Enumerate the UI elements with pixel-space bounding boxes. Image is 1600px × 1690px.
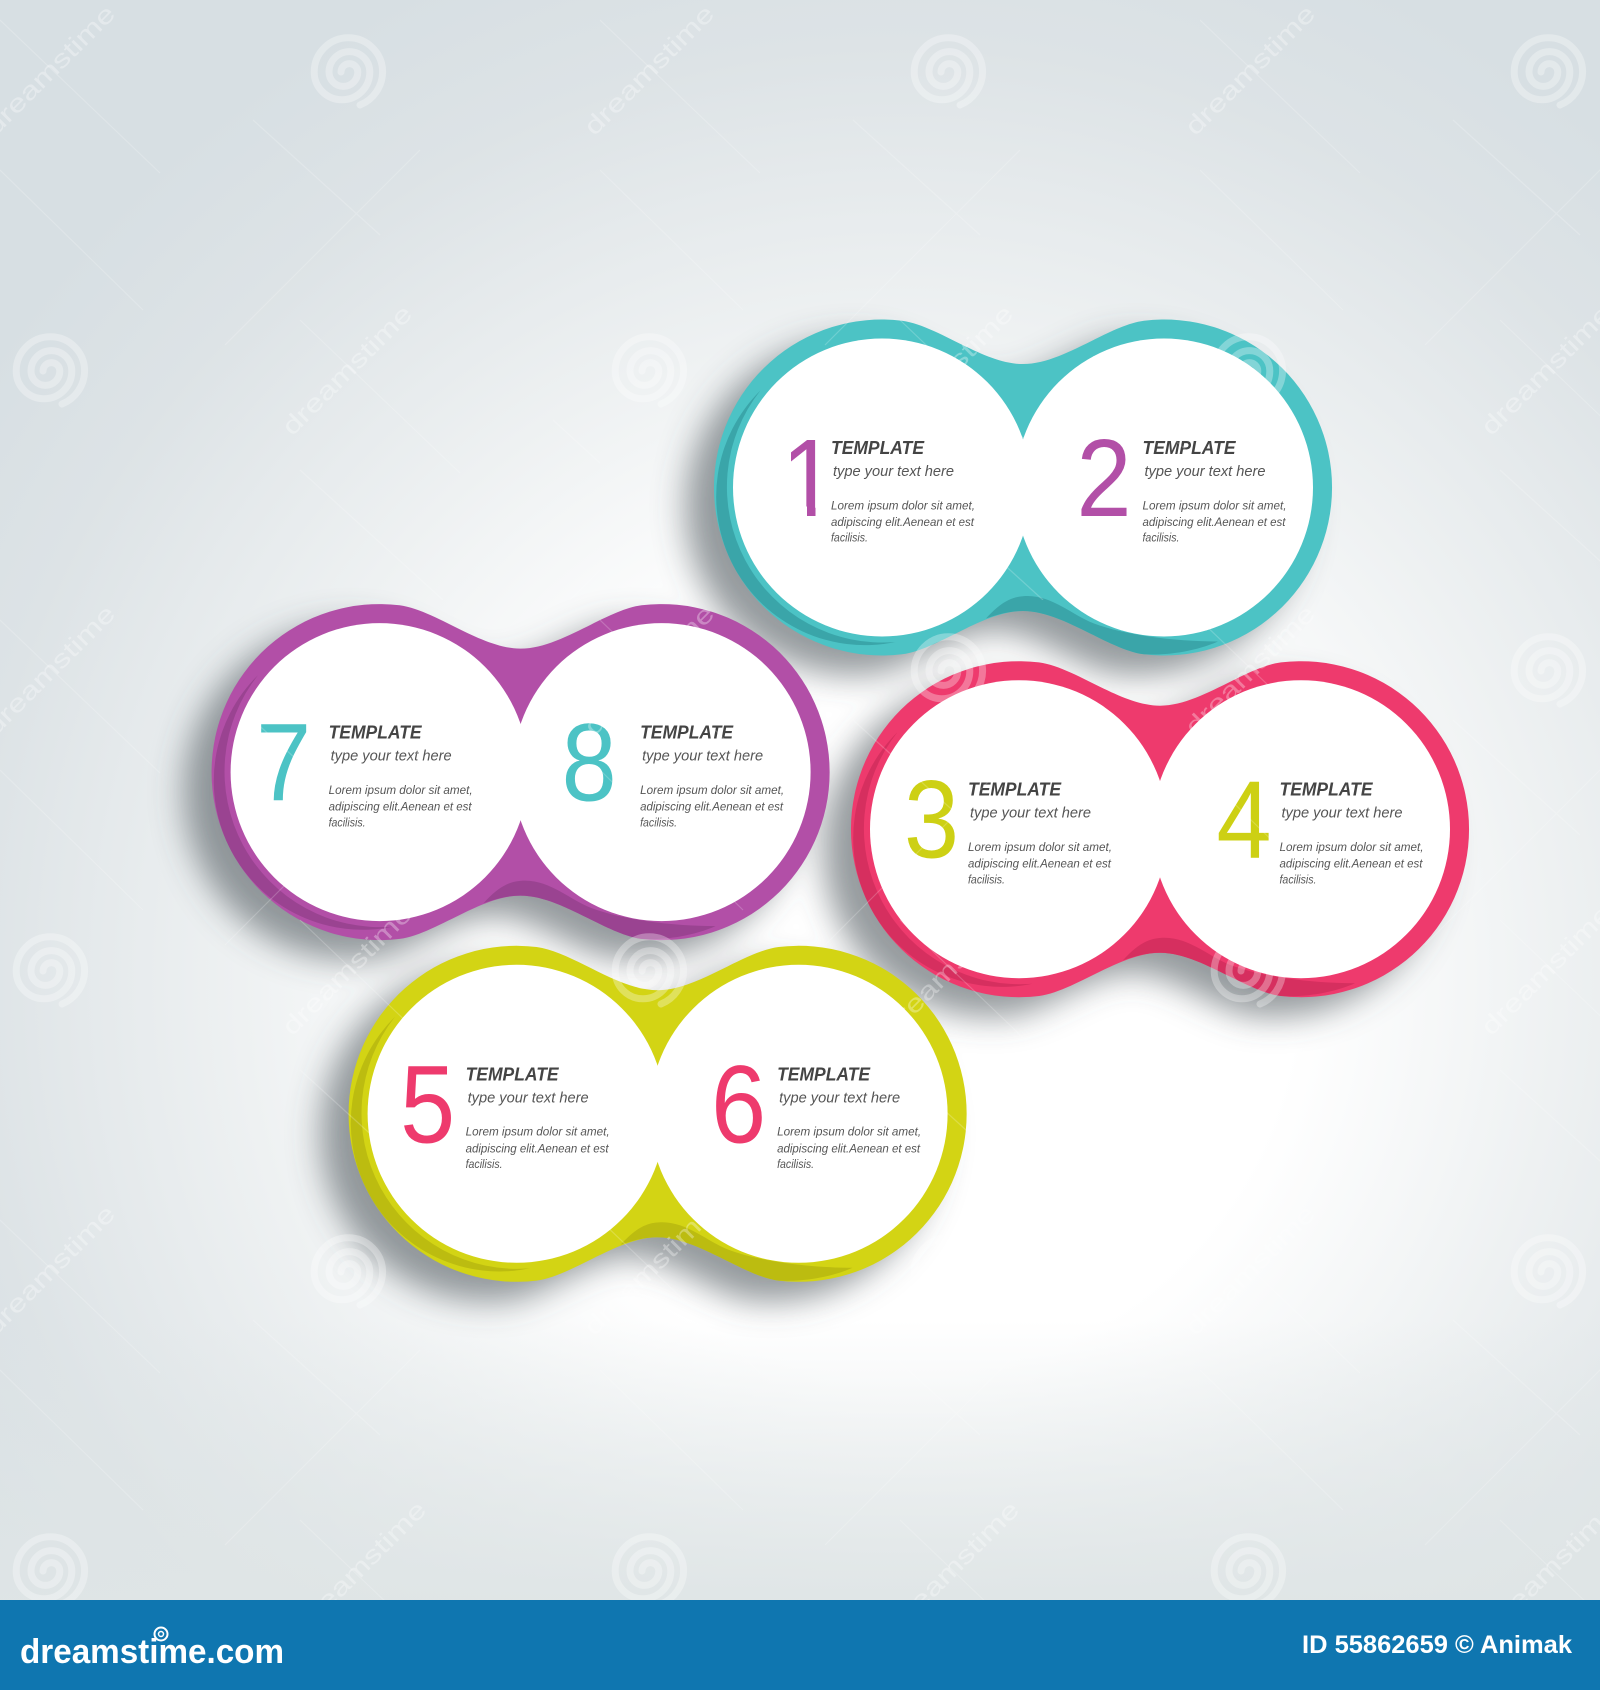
footer image id: ID 55862659 © Animak [1302, 1631, 1572, 1659]
number 5: 5 [400, 1043, 455, 1166]
watermark overlay: dreamstime [277, 900, 418, 1041]
heading step 6: TEMPLATE [777, 1063, 871, 1084]
subheading step 7: type your text here [331, 748, 452, 765]
body step 5: Lorem ipsum dolor sit amet, [466, 1127, 610, 1139]
watermark overlay: dreamstime [579, 0, 720, 141]
body step 5: adipiscing elit.Aenean et est [466, 1143, 609, 1155]
subheading step 1: type your text here [833, 463, 954, 480]
watermark overlay: dreamstime [1476, 300, 1600, 441]
icon: footer logo spiral [154, 1628, 168, 1640]
body step 3: adipiscing elit.Aenean et est [968, 859, 1112, 871]
number 6: 6 [711, 1043, 766, 1166]
body step 8: adipiscing elit.Aenean et est [640, 802, 784, 814]
body step 2: adipiscing elit.Aenean et est [1142, 517, 1286, 529]
body step 4: adipiscing elit.Aenean et est [1280, 859, 1423, 871]
body step 5: facilisis. [466, 1159, 503, 1171]
subheading step 3: type your text here [970, 805, 1091, 822]
subheading step 8: type your text here [642, 748, 763, 765]
subheading step 6: type your text here [779, 1089, 900, 1106]
panel: yellow steps 5 and 6 [349, 946, 967, 1282]
watermark overlay: dreamstime [579, 600, 720, 741]
body step 1 [831, 500, 975, 545]
subheading step 2: type your text here [1144, 463, 1266, 480]
soft shadows of the four shapes [184, 340, 1441, 1302]
body step 7: facilisis. [329, 817, 366, 829]
watermark overlay: dreamstime [1180, 0, 1321, 141]
footer logo text: dreamstime.com [20, 1633, 284, 1671]
heading step 4: TEMPLATE [1280, 779, 1373, 800]
body step 6: Lorem ipsum dolor sit amet, [777, 1127, 921, 1139]
subheading step 4: type your text here [1282, 805, 1402, 822]
heading step 8: TEMPLATE [640, 722, 734, 743]
panel: purple steps 7 and 8 [212, 604, 830, 940]
watermark overlay: dreamstime [579, 1200, 720, 1341]
body step 1: adipiscing elit.Aenean et est [831, 517, 975, 529]
body step 6: facilisis. [777, 1159, 814, 1171]
body step 4: Lorem ipsum dolor sit amet, [1280, 842, 1424, 854]
number 4: 4 [1216, 759, 1272, 882]
body step 6 [777, 1127, 921, 1171]
body step 2: facilisis. [1142, 533, 1180, 545]
body step 7: adipiscing elit.Aenean et est [329, 802, 472, 814]
number 3: 3 [904, 759, 959, 882]
body step 4: facilisis. [1280, 874, 1316, 886]
body step 8: facilisis. [640, 817, 677, 829]
watermark overlay: dreamstime [1180, 1200, 1321, 1341]
body step 2: Lorem ipsum dolor sit amet, [1142, 500, 1286, 512]
heading step 2: TEMPLATE [1142, 437, 1236, 458]
watermark overlay: dreamstime [291, 1496, 432, 1637]
body step 6: adipiscing elit.Aenean et est [777, 1143, 921, 1155]
body step 7 [329, 785, 473, 829]
panel: teal steps 1 and 2 [714, 320, 1332, 656]
watermark overlay: dreamstime [1180, 600, 1321, 741]
body step 2 [1142, 500, 1286, 545]
number 1: 1 [782, 417, 836, 540]
panel: pink steps 3 and 4 [851, 661, 1469, 997]
watermark overlay: dreamstime [1482, 1496, 1600, 1637]
body step 3 [968, 842, 1112, 886]
number 8: 8 [562, 702, 617, 825]
heading step 7: TEMPLATE [329, 722, 422, 743]
number 7: 7 [256, 702, 311, 825]
watermark overlay: dreamstime [884, 1496, 1025, 1637]
body step 3: Lorem ipsum dolor sit amet, [968, 842, 1112, 854]
heading step 3: TEMPLATE [968, 779, 1062, 800]
body step 1: facilisis. [831, 533, 868, 545]
number 2: 2 [1076, 417, 1132, 540]
subheading step 5: type your text here [468, 1089, 589, 1106]
footer bar [0, 1600, 1600, 1690]
watermark overlay: dreamstime [1476, 900, 1600, 1041]
watermark overlay: dreamstime [277, 300, 418, 441]
body step 7: Lorem ipsum dolor sit amet, [329, 785, 473, 797]
watermark overlay: dreamstime [878, 300, 1019, 441]
body step 1: Lorem ipsum dolor sit amet, [831, 500, 975, 512]
watermark overlay: dreamstime [878, 900, 1019, 1041]
heading step 5: TEMPLATE [466, 1063, 559, 1084]
body step 5 [466, 1127, 610, 1171]
body step 8 [640, 785, 784, 829]
body step 8: Lorem ipsum dolor sit amet, [640, 785, 784, 797]
heading step 1: TEMPLATE [831, 437, 925, 458]
body step 4 [1280, 842, 1424, 886]
body step 3: facilisis. [968, 874, 1005, 886]
